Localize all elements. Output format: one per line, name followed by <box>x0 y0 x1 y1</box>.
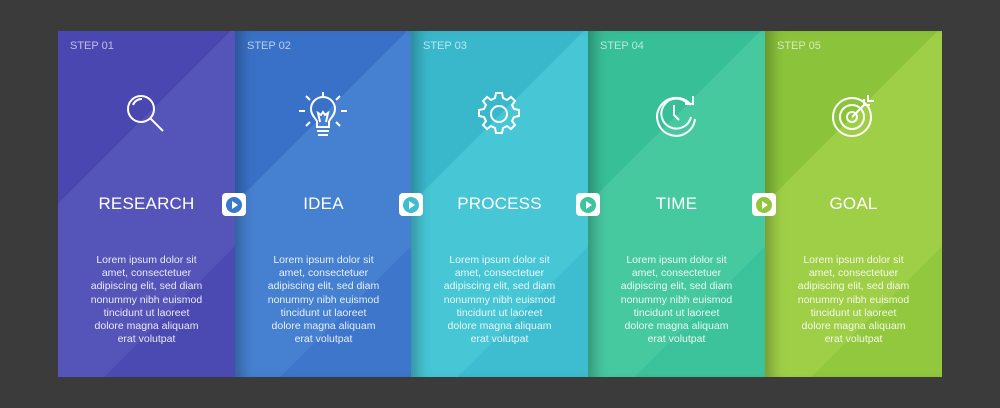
text block: dolore magna aliquam <box>448 320 551 332</box>
icon: target <box>832 95 874 137</box>
text block: nonummy nibh euismod <box>798 294 909 306</box>
arrow: play button 2 <box>399 193 423 216</box>
text block: adipiscing elit, sed diam <box>444 280 555 292</box>
text block: Lorem ipsum dolor sit <box>449 254 550 266</box>
arrow: play button 4 <box>752 193 776 216</box>
icon: gear <box>478 92 520 134</box>
text block: adipiscing elit, sed diam <box>621 280 732 292</box>
step label: STEP 02 <box>247 40 291 52</box>
text block: Lorem ipsum dolor sit <box>273 254 374 266</box>
text block: erat volutpat <box>295 333 352 345</box>
text block: amet, consectetuer <box>102 267 191 279</box>
step label: STEP 03 <box>423 40 467 52</box>
text block: nonummy nibh euismod <box>91 294 202 306</box>
panel: step 04 time <box>588 31 765 377</box>
step label: STEP 04 <box>600 40 644 52</box>
text block: adipiscing elit, sed diam <box>798 280 909 292</box>
text block: amet, consectetuer <box>632 267 721 279</box>
step label: STEP 01 <box>70 40 114 52</box>
panel: step 03 process <box>411 31 588 377</box>
text block <box>91 254 202 345</box>
panel: step 02 idea <box>235 31 411 377</box>
step label: STEP 05 <box>777 40 821 52</box>
text block <box>621 254 732 345</box>
text block: amet, consectetuer <box>455 267 544 279</box>
heading: RESEARCH <box>98 194 195 213</box>
text block: nonummy nibh euismod <box>268 294 379 306</box>
text block: amet, consectetuer <box>279 267 368 279</box>
text block: dolore magna aliquam <box>802 320 905 332</box>
text block: adipiscing elit, sed diam <box>91 280 202 292</box>
panel: step 05 goal <box>765 31 942 377</box>
text block: tincidunt ut laoreet <box>811 307 896 319</box>
arrow: play button 3 <box>576 193 600 216</box>
heading: PROCESS <box>457 194 542 213</box>
arrow: play button 1 <box>222 193 246 216</box>
text block: amet, consectetuer <box>809 267 898 279</box>
text block <box>268 254 379 345</box>
text block: Lorem ipsum dolor sit <box>626 254 727 266</box>
text block: erat volutpat <box>648 333 705 345</box>
text block: Lorem ipsum dolor sit <box>96 254 197 266</box>
icon: clock refresh <box>656 96 696 137</box>
text block: tincidunt ut laoreet <box>634 307 719 319</box>
text block: erat volutpat <box>825 333 882 345</box>
text block <box>798 254 909 345</box>
text block: erat volutpat <box>471 333 528 345</box>
text block: erat volutpat <box>118 333 175 345</box>
panel: step 01 research <box>58 31 235 377</box>
text block <box>444 254 555 345</box>
text block: nonummy nibh euismod <box>444 294 555 306</box>
text block: dolore magna aliquam <box>272 320 375 332</box>
text block: dolore magna aliquam <box>625 320 728 332</box>
text block: tincidunt ut laoreet <box>281 307 366 319</box>
text block: tincidunt ut laoreet <box>457 307 542 319</box>
text block: Lorem ipsum dolor sit <box>803 254 904 266</box>
text block: tincidunt ut laoreet <box>104 307 189 319</box>
heading: TIME <box>656 194 697 213</box>
icon: magnifier <box>127 95 164 132</box>
heading: GOAL <box>829 194 878 213</box>
heading: IDEA <box>303 194 344 213</box>
text block: nonummy nibh euismod <box>621 294 732 306</box>
text block: adipiscing elit, sed diam <box>268 280 379 292</box>
icon: light bulb <box>299 92 347 136</box>
text block: dolore magna aliquam <box>95 320 198 332</box>
